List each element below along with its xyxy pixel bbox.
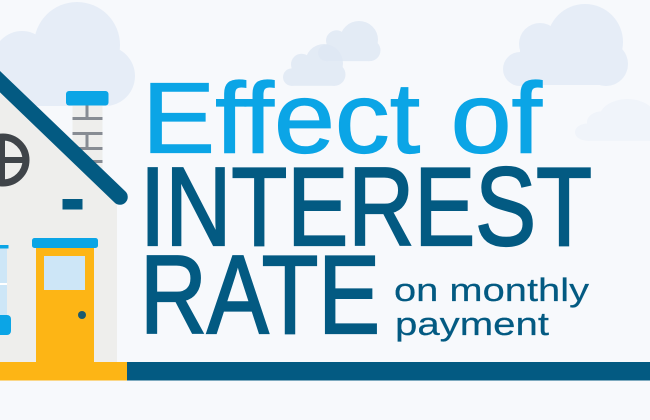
house bbox=[0, 74, 120, 364]
cloud: small centre right bbox=[318, 21, 380, 61]
round attic window bbox=[0, 137, 26, 183]
subtitle line: on monthly: on monthly bbox=[394, 272, 589, 308]
house wall bbox=[0, 90, 117, 364]
roof bbox=[0, 74, 120, 197]
cloud: large left bbox=[0, 2, 135, 106]
cloud: faint far right bbox=[575, 99, 650, 141]
ground bar: dark blue bbox=[127, 362, 650, 380]
title line: Effect of: Effect of bbox=[142, 62, 542, 174]
subtitle line: payment: payment bbox=[395, 306, 549, 342]
ground bar: yellow bbox=[0, 362, 127, 380]
cloud: top right bbox=[503, 4, 628, 86]
wall vent bbox=[62, 199, 82, 210]
door bbox=[32, 238, 98, 364]
title line: RATE: RATE bbox=[140, 233, 380, 357]
cloud: small centre left bbox=[283, 44, 346, 86]
chimney bbox=[66, 91, 108, 174]
side window bbox=[0, 245, 11, 335]
